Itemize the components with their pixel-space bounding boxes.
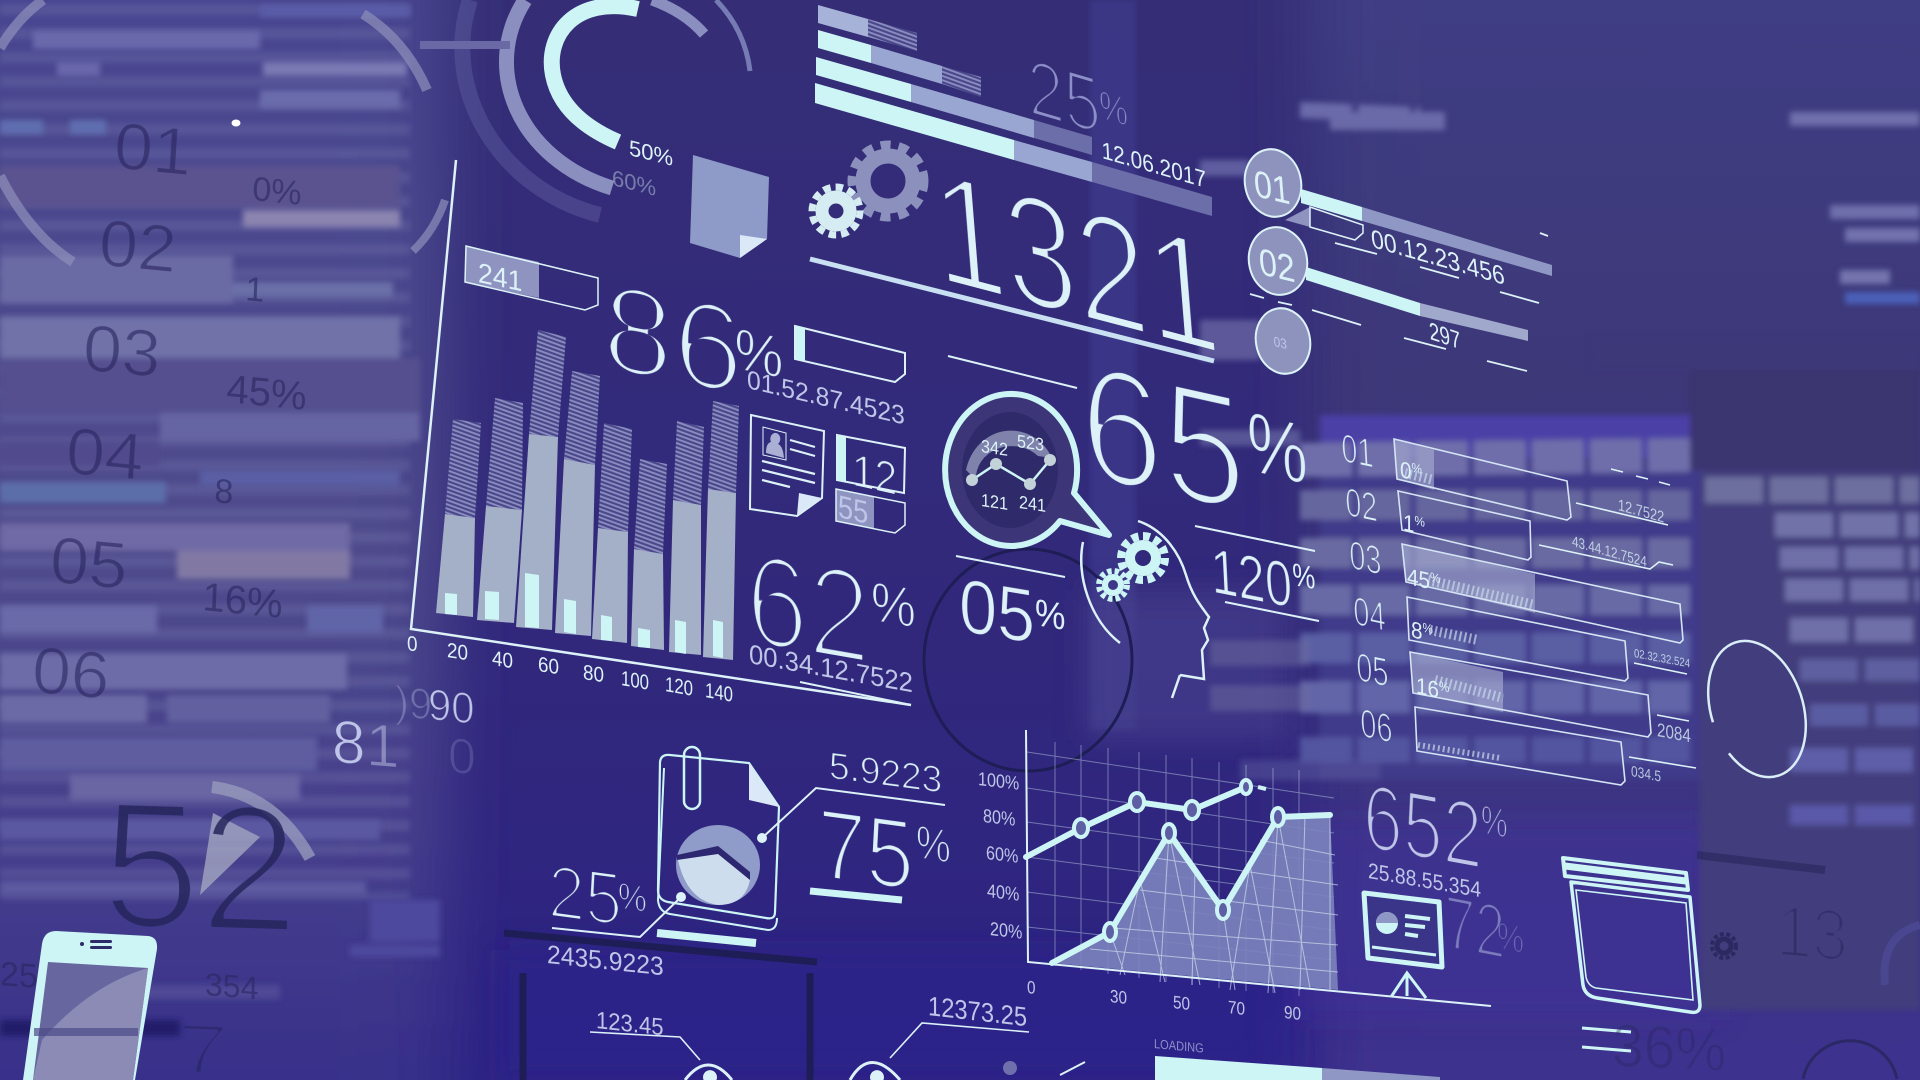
speech bubble dial chart — [945, 394, 1109, 546]
side codes: 12.7522 — [1618, 497, 1664, 527]
icon: presentation board — [1364, 893, 1442, 998]
percent labels by donut: 60% — [612, 165, 656, 201]
faded mirrored list numbers, left: 06 — [30, 634, 112, 714]
stat: 75 percent with 5.9223: 75 — [818, 788, 914, 911]
ring, far right — [1692, 628, 1822, 790]
area fill — [1052, 815, 1338, 990]
y labels: 20% — [990, 918, 1023, 943]
circle 01: 01 — [1252, 162, 1292, 213]
upper line — [1026, 787, 1246, 857]
stat: 05 percent: % — [1035, 591, 1065, 638]
axis labels: 140 — [705, 679, 733, 707]
stat: 62 percent: 00.34.12.7522 — [749, 639, 913, 698]
row percent labels: 1 — [1403, 509, 1415, 538]
row percent labels: 0 — [1400, 456, 1412, 485]
donut arcs, top — [420, 0, 750, 215]
row numbers: 04 — [1352, 589, 1386, 640]
faded mirrored list numbers, left: 0% — [252, 170, 302, 213]
side codes: 43.44.12.7524 — [1572, 533, 1647, 570]
row percent labels: % — [1423, 620, 1433, 637]
stat: 62 percent: % — [871, 570, 916, 640]
row numbers: 01 — [1340, 426, 1374, 477]
percentage bar list, right — [1340, 426, 1696, 785]
icon: smartphone — [23, 931, 157, 1080]
tag 241: 241 — [478, 257, 522, 297]
x labels: 70 — [1228, 997, 1245, 1019]
stat: 05 percent: 05 — [959, 563, 1035, 660]
icon: tablet outline — [1563, 858, 1700, 1012]
circle 02: 02 — [1257, 240, 1297, 291]
faded figures, lower left: 354 — [205, 966, 258, 1006]
chart axes — [411, 160, 911, 705]
box with 12: 12 — [852, 445, 897, 505]
faded mirrored list numbers, left: 16% — [202, 575, 283, 627]
side codes: 034.5 — [1631, 763, 1661, 785]
x labels: 50 — [1173, 992, 1190, 1014]
line and area chart — [978, 730, 1491, 1024]
row percent labels: % — [1430, 570, 1440, 587]
tag 241 — [465, 246, 598, 310]
faded number 90 and 81: 1 — [366, 711, 399, 781]
stat: 652 percent: % — [1481, 797, 1508, 847]
stat: 75 percent with 5.9223 — [757, 744, 951, 911]
axis labels: 60 — [538, 653, 559, 679]
code 297: 297 — [1428, 317, 1462, 355]
stat: 62 percent: 62 — [746, 525, 870, 691]
axis labels: 0 — [407, 632, 418, 657]
row fills — [1394, 439, 1535, 712]
faded mirrored list numbers, left — [30, 110, 307, 714]
code 00.12.23.456: 00.12.23.456 — [1370, 224, 1506, 291]
faded mirrored list numbers, left: 8 — [214, 472, 234, 512]
icon: document page — [690, 155, 769, 258]
gauge 12373.25, bottom — [850, 992, 1085, 1080]
speech bubble dial chart: 121 — [981, 489, 1008, 514]
stat: 120 percent — [1195, 526, 1319, 623]
x labels: 90 — [1284, 1002, 1301, 1024]
stat: 86 percent — [601, 256, 905, 431]
faded number 90 and 81: 90 — [428, 680, 474, 734]
speech bubble dial chart: 342 — [981, 435, 1008, 460]
row outlines — [1394, 439, 1683, 785]
dark circle behind 05 percent — [924, 549, 1132, 771]
stat: 86 percent: 86 — [601, 256, 745, 422]
row percent labels: 16 — [1416, 672, 1439, 703]
faint 72 percent: % — [1497, 915, 1524, 962]
area mesh — [1090, 815, 1338, 993]
stat: 05 percent — [956, 556, 1065, 660]
white dot — [232, 120, 240, 126]
grid — [1027, 742, 1334, 996]
stat: 652 percent: 652 — [1363, 762, 1482, 889]
axis labels: 120 — [665, 673, 693, 701]
faded mirrored list numbers, left: 04 — [64, 415, 146, 495]
chart bars — [436, 330, 739, 660]
row numbers — [1340, 426, 1393, 752]
dark tablet outline, bottom centre — [504, 933, 817, 1080]
circle 01 — [1239, 144, 1307, 222]
faded mirrored list numbers, left: 03 — [81, 312, 163, 392]
faded pie with number 52: 52 — [102, 763, 298, 970]
side codes — [1572, 497, 1691, 785]
faded figures, lower left — [0, 955, 258, 1080]
row percent labels: % — [1439, 679, 1449, 696]
row numbers: 06 — [1359, 701, 1393, 752]
faded figures, lower left: 25 — [0, 955, 38, 996]
x labels: 0 — [1027, 977, 1036, 998]
row mini bars — [1405, 473, 1535, 758]
y labels: 100% — [978, 768, 1020, 794]
x labels — [1027, 977, 1301, 1024]
stat: 120 percent: 120 — [1209, 535, 1294, 623]
stat: 75 percent with 5.9223: 5.9223 — [829, 744, 942, 801]
stat: 86 percent: 01.52.87.4523 — [747, 366, 905, 431]
stat: 25 percent with 2435.9223 — [547, 849, 686, 981]
percent labels by donut: 50% — [629, 135, 673, 171]
faded mirrored list numbers, left: 02 — [97, 207, 179, 287]
stat: 86 percent: % — [734, 316, 784, 392]
gauge 123.45, bottom: 123.45 — [596, 1006, 664, 1041]
stat: 120 percent: % — [1292, 558, 1316, 597]
file icon with pie — [657, 747, 779, 943]
stat: 652 percent: 25.88.55.354 — [1368, 859, 1481, 903]
circle 02 — [1243, 222, 1313, 300]
faded mirrored list numbers, left: 01 — [112, 110, 194, 190]
gauge 123.45, bottom — [590, 1006, 732, 1080]
pill bar 02 — [1306, 267, 1420, 316]
loading bar — [1154, 1036, 1440, 1080]
axis labels: 80 — [583, 661, 604, 687]
faded number 90 and 81: 8 — [332, 708, 365, 778]
faded number 90 and 81 — [332, 677, 476, 786]
box with 55: 55 — [838, 489, 868, 532]
faint dark widgets, lower right — [1697, 855, 1920, 1079]
faded number 90 and 81: )9 — [395, 677, 432, 730]
speech bubble dial chart: 241 — [1019, 491, 1046, 516]
faint 72 percent: 72 — [1445, 879, 1505, 975]
axes — [1026, 730, 1491, 1006]
row percent labels — [1400, 456, 1449, 706]
circle 03: 03 — [1273, 333, 1287, 352]
axis labels — [407, 632, 733, 707]
side codes: 2084 — [1657, 718, 1691, 747]
numbered pills, top right — [1239, 144, 1552, 379]
axis labels: 100 — [621, 667, 649, 695]
stat: 25 percent with 2435.9223: 2435.9223 — [547, 941, 664, 981]
row percent labels: 8 — [1411, 616, 1423, 645]
row percent labels: % — [1412, 460, 1422, 477]
icon: gears — [812, 145, 924, 235]
circle 03 — [1250, 303, 1316, 379]
faint circle arcs, upper left — [0, 0, 445, 262]
small tag — [1285, 207, 1310, 227]
icon: resume document — [750, 415, 824, 516]
stacked progress bars, top — [815, 5, 1212, 216]
loading bar: LOADING — [1154, 1036, 1204, 1056]
bar chart — [407, 160, 911, 707]
box with 55 — [836, 489, 905, 533]
icon: head with gears — [1081, 521, 1209, 698]
faded mirrored list numbers, left: 05 — [48, 524, 130, 604]
faint dark widgets, lower right: 13 — [1776, 890, 1848, 977]
row percent labels: 45 — [1407, 563, 1430, 594]
row numbers: 05 — [1355, 645, 1389, 696]
stat: 65 percent: % — [1246, 393, 1309, 504]
box with 12 — [837, 435, 905, 505]
area line — [1052, 815, 1330, 963]
row numbers: 03 — [1348, 533, 1382, 584]
axis labels: 40 — [492, 647, 513, 673]
stat: 25 percent with 2435.9223: % — [618, 877, 647, 920]
stat: 25 percent with 2435.9223: 25 — [548, 849, 622, 942]
row percent labels: % — [1415, 513, 1425, 530]
y labels: 60% — [986, 842, 1019, 867]
date and 25 percent: 12.06.2017 — [1101, 136, 1207, 193]
stat: 65 percent: 65 — [1078, 326, 1248, 548]
stat: 62 percent — [746, 525, 916, 705]
side lines — [1539, 469, 1696, 768]
faded mirrored list numbers, left: 45% — [226, 367, 307, 419]
short dashes — [1250, 233, 1548, 371]
y labels: 40% — [987, 880, 1020, 905]
date and 25 percent: 25 — [1025, 41, 1103, 152]
row numbers: 02 — [1344, 480, 1378, 531]
pill bar 01 — [1301, 189, 1362, 221]
y labels — [978, 768, 1023, 943]
gauge 12373.25, bottom: 12373.25 — [928, 992, 1027, 1033]
axis labels: 20 — [447, 639, 468, 665]
side codes: 02.32.32.524 — [1634, 647, 1690, 671]
date and 25 percent: % — [1098, 82, 1129, 135]
y labels: 80% — [983, 805, 1016, 830]
faded mirrored list numbers, left: 1 — [245, 270, 265, 310]
percent labels by donut — [612, 135, 673, 201]
big number 1321: 1321 — [927, 136, 1226, 390]
faded number 90 and 81: 0 — [448, 727, 476, 786]
x labels: 30 — [1110, 986, 1127, 1008]
stat: 75 percent with 5.9223: % — [916, 816, 951, 873]
date and 25 percent — [1025, 41, 1207, 193]
speech bubble dial chart: 523 — [1017, 430, 1044, 455]
data points — [1074, 780, 1284, 941]
